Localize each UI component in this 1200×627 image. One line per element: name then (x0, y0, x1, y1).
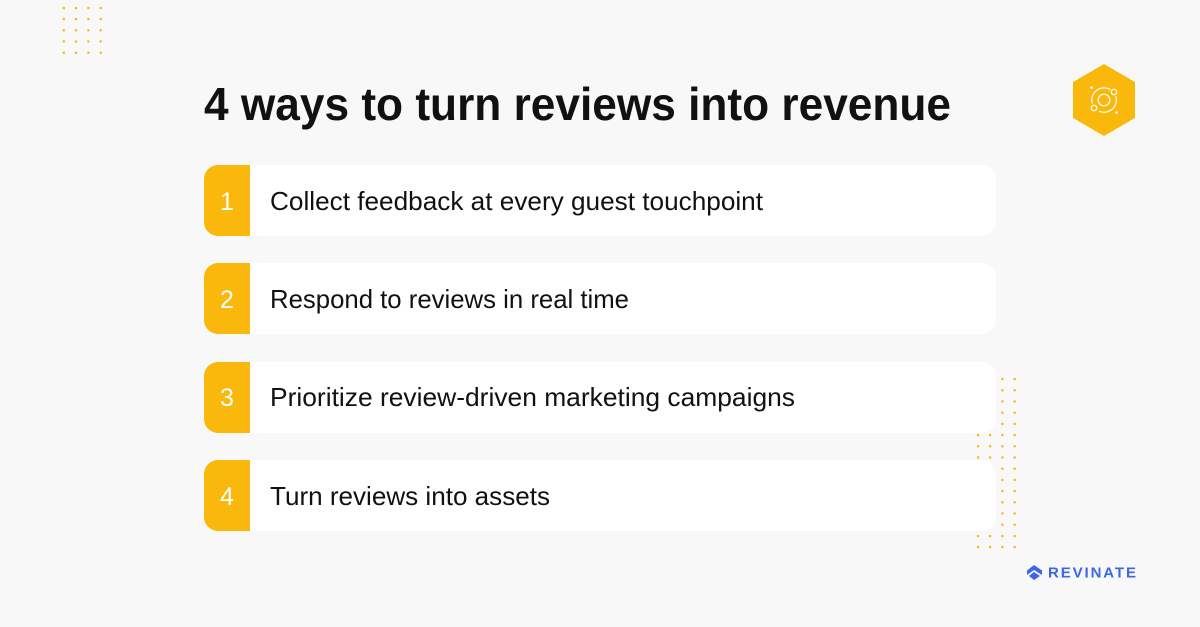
list item 2: 2 (220, 286, 234, 314)
list item 1: Collect feedback at every guest touchpoint (270, 186, 764, 216)
list item 1 (204, 165, 996, 236)
title: 4 ways to turn reviews into revenue (204, 78, 951, 130)
list item 4: 4 (220, 483, 234, 511)
list item 4 (204, 460, 996, 531)
logo: Revinate: REVINATE (1048, 564, 1136, 582)
list item 4: Turn reviews into assets (270, 481, 550, 511)
list item 3: Prioritize review-driven marketing campaigns (270, 382, 795, 412)
list item 2 (204, 263, 996, 334)
list item 2: Respond to reviews in real time (270, 284, 629, 314)
list item 3: 3 (220, 384, 234, 412)
dot grid: right of list (977, 378, 1016, 548)
dot grid: top left (63, 7, 102, 54)
icon: hexagon with orbit (1073, 64, 1135, 136)
list item 1: 1 (220, 188, 234, 216)
list item 3 (204, 362, 996, 433)
